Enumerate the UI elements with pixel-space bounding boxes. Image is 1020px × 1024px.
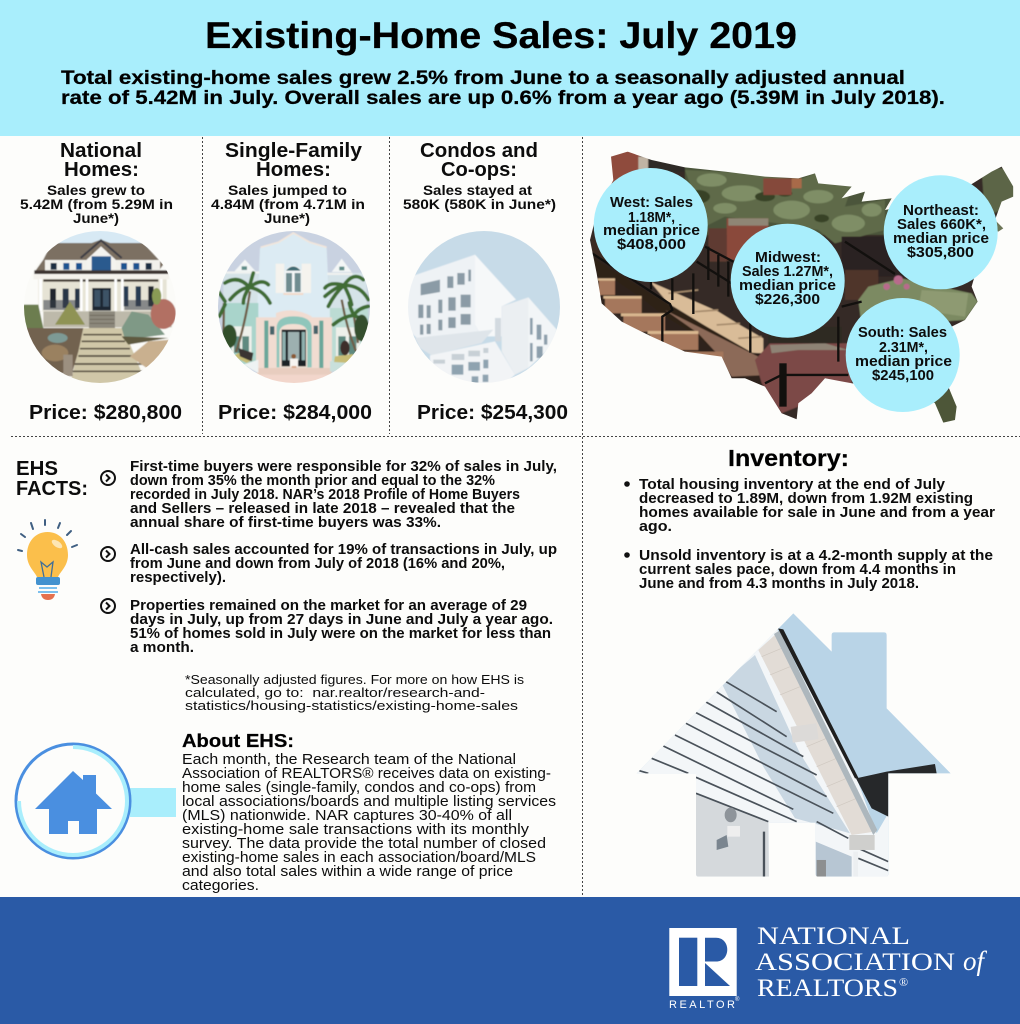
footer band — [0, 897, 1020, 1024]
fact 1 text: and Sellers – released in late 2018 – revealed that the — [130, 501, 515, 517]
text: single-family sales: June*) — [264, 210, 310, 226]
about body text: local associations/boards and multiple listing services — [182, 794, 556, 810]
heading: EHS facts: EHS — [16, 458, 58, 480]
realtor logo mark: REALTOR — [669, 999, 735, 1011]
callout: south — [846, 298, 960, 412]
map of USA filled with brownstone photo — [585, 147, 1020, 427]
text: condos sales: Sales stayed at — [423, 182, 532, 198]
inventory bullet 2: Unsold inventory is at a 4.2-month supply at the — [639, 548, 993, 564]
heading: single-family homes: Single-Family — [225, 140, 363, 162]
about body text: Each month, the Research team of the National — [182, 752, 516, 768]
callout: west: 1.18M*, — [628, 210, 675, 226]
footnote — [185, 673, 524, 713]
text: single-family sales — [211, 182, 365, 226]
fact 2 text: from June and down from July of 2018 (16% and 20%, — [130, 556, 505, 572]
price: single-family: Price: $284,000 — [218, 402, 372, 424]
panel: inventory — [620, 445, 995, 890]
bullet arrow 2 — [101, 547, 115, 561]
about body text: existing-home sale transactions with its monthly — [182, 822, 530, 838]
callout: west: median price — [603, 223, 700, 239]
callout: south: $245,100 — [872, 368, 934, 384]
about body text: and also total sales within a wide range of price — [182, 864, 513, 880]
association wordmark: NATIONAL — [757, 923, 910, 950]
text: national sales: June*) — [73, 210, 119, 226]
about body text — [182, 752, 556, 894]
fact 3 text: 51% of homes sold in July were on the market for less than — [130, 626, 551, 642]
fact 3 text: Properties remained on the market for an average of 29 — [130, 598, 527, 614]
house-shaped photo — [636, 614, 950, 877]
fact 2 text: respectively). — [130, 570, 226, 586]
fact 3 text: days in July, up from 27 days in June and July a year ago. — [130, 612, 553, 628]
callout: northeast: $305,800 — [907, 245, 974, 261]
about heading: About EHS: — [182, 730, 294, 751]
realtor logo mark: ® — [735, 996, 740, 1003]
fact 1 text — [130, 459, 557, 531]
text: national sales: Sales grew to — [47, 182, 145, 198]
panel: national homes — [15, 140, 185, 424]
about body text: existing-home sales in each association/board/MLS — [182, 850, 536, 866]
about body text: home sales (single-family, condos and co-ops) from — [182, 780, 536, 796]
heading: condos and co-ops: Co-ops: — [441, 159, 517, 181]
association wordmark: ® — [899, 975, 908, 989]
fact 1 text: annual share of first-time buyers was 33%. — [130, 515, 441, 531]
callout: northeast — [884, 175, 998, 289]
inventory bullet 1: ago. — [639, 519, 672, 535]
header band — [0, 0, 1020, 136]
heading: national homes — [60, 140, 142, 181]
text: single-family sales: Sales jumped to — [228, 182, 347, 198]
panel: regional map — [585, 147, 1020, 427]
heading: condos and co-ops — [420, 140, 538, 181]
footnote: statistics/housing-statistics/existing-home-sales — [185, 699, 518, 713]
title: Existing-Home Sales: July 2019 — [205, 15, 797, 56]
callout: northeast: Sales 660K*, — [897, 217, 986, 233]
footnote: calculated, go to: nar.realtor/research-and- — [185, 686, 485, 700]
about body text: categories. — [182, 878, 259, 894]
fact 3 text — [130, 598, 553, 656]
callout: west — [594, 168, 708, 282]
callout: west: West: Sales — [610, 195, 693, 211]
association wordmark: REALTORS — [757, 975, 898, 1002]
bullet arrow 1 — [101, 471, 115, 485]
footnote: *Seasonally adjusted figures. For more on how EHS is — [185, 673, 524, 687]
fact 1 text: recorded in July 2018. NAR’s 2018 Profile of Home Buyers — [130, 487, 520, 503]
bullet arrow 3 — [101, 599, 115, 613]
subtitle — [61, 67, 945, 109]
subtitle: Total existing-home sales grew 2.5% from June to a seasonally adjusted annual — [61, 67, 905, 89]
inventory bullet 1: Total housing inventory at the end of July — [639, 477, 945, 493]
heading: EHS facts — [16, 458, 88, 500]
photo: white condo tower — [408, 231, 560, 383]
inventory bullet 2: current sales pace, down from 4.4 months in — [639, 562, 956, 578]
icon: light bulb — [18, 520, 77, 600]
inventory bullet 1: homes available for sale in June and from a year — [639, 505, 995, 521]
panel: condos and co-ops — [400, 140, 570, 424]
text: single-family sales: 4.84M (from 4.71M in — [211, 196, 365, 212]
text: condos sales: 580K (580K in June*) — [403, 196, 556, 212]
heading: single-family homes — [225, 140, 363, 181]
callout: northeast: median price — [893, 231, 989, 247]
inventory bullet 1 — [624, 477, 995, 535]
about body text: survey. The data provide the total number of closed — [182, 836, 546, 852]
photo: craftsman house — [24, 231, 176, 383]
fact 1 text: down from 35% the month prior and equal to the 32% — [130, 473, 495, 489]
about body text: (MLS) nationwide. NAR captures 30-40% of all — [182, 808, 512, 824]
price: condos: Price: $254,300 — [417, 402, 568, 424]
callout: west: $408,000 — [617, 237, 686, 253]
fact 3 text: a month. — [130, 640, 194, 656]
panel: EHS facts — [16, 458, 557, 713]
fact 1 text: First-time buyers were responsible for 32% of sales in July, — [130, 459, 557, 475]
heading: national homes: National — [60, 140, 142, 162]
heading: condos and co-ops: Condos and — [420, 140, 538, 162]
callout: midwest — [731, 224, 845, 338]
callout: midwest: Sales 1.27M*, — [742, 264, 833, 280]
callout: midwest: $226,300 — [755, 292, 820, 308]
dashed dividers — [11, 137, 1020, 897]
text: national sales — [20, 182, 173, 226]
callout: midwest: median price — [739, 278, 836, 294]
panel: about EHS — [16, 730, 556, 894]
callout: midwest: Midwest: — [755, 250, 821, 266]
inventory bullet 1: decreased to 1.89M, down from 1.92M existing — [639, 491, 973, 507]
association wordmark: of — [963, 946, 988, 976]
heading: EHS facts: FACTS: — [16, 478, 88, 500]
panel: single-family homes — [210, 140, 380, 424]
callout: south: 2.31M*, — [879, 340, 928, 356]
heading: national homes: Homes: — [64, 159, 139, 181]
fact 2 text — [130, 542, 557, 586]
realtor logo mark — [669, 928, 740, 1011]
text: national sales: 5.42M (from 5.29M in — [20, 196, 173, 212]
inventory bullet 2: June and from 4.3 months in July 2018. — [639, 576, 919, 592]
inventory heading: Inventory: — [728, 445, 849, 471]
callout: south: median price — [855, 354, 952, 370]
price: national: Price: $280,800 — [29, 402, 182, 424]
association wordmark: ASSOCIATION — [755, 949, 955, 976]
text: condos sales — [403, 182, 556, 212]
association wordmark — [755, 923, 988, 1002]
photo: pastel house with palms — [218, 231, 370, 383]
icon: house in circle — [16, 744, 176, 858]
inventory bullet 2 — [624, 548, 993, 592]
callout: south: South: Sales — [858, 325, 947, 341]
subtitle: rate of 5.42M in July. Overall sales are up 0.6% from a year ago (5.39M in July 2018). — [61, 87, 945, 109]
heading: single-family homes: Homes: — [256, 159, 331, 181]
fact 2 text: All-cash sales accounted for 19% of transactions in July, up — [130, 542, 557, 558]
about body text: Association of REALTORS® receives data on existing- — [182, 766, 551, 782]
callout: northeast: Northeast: — [903, 203, 979, 219]
